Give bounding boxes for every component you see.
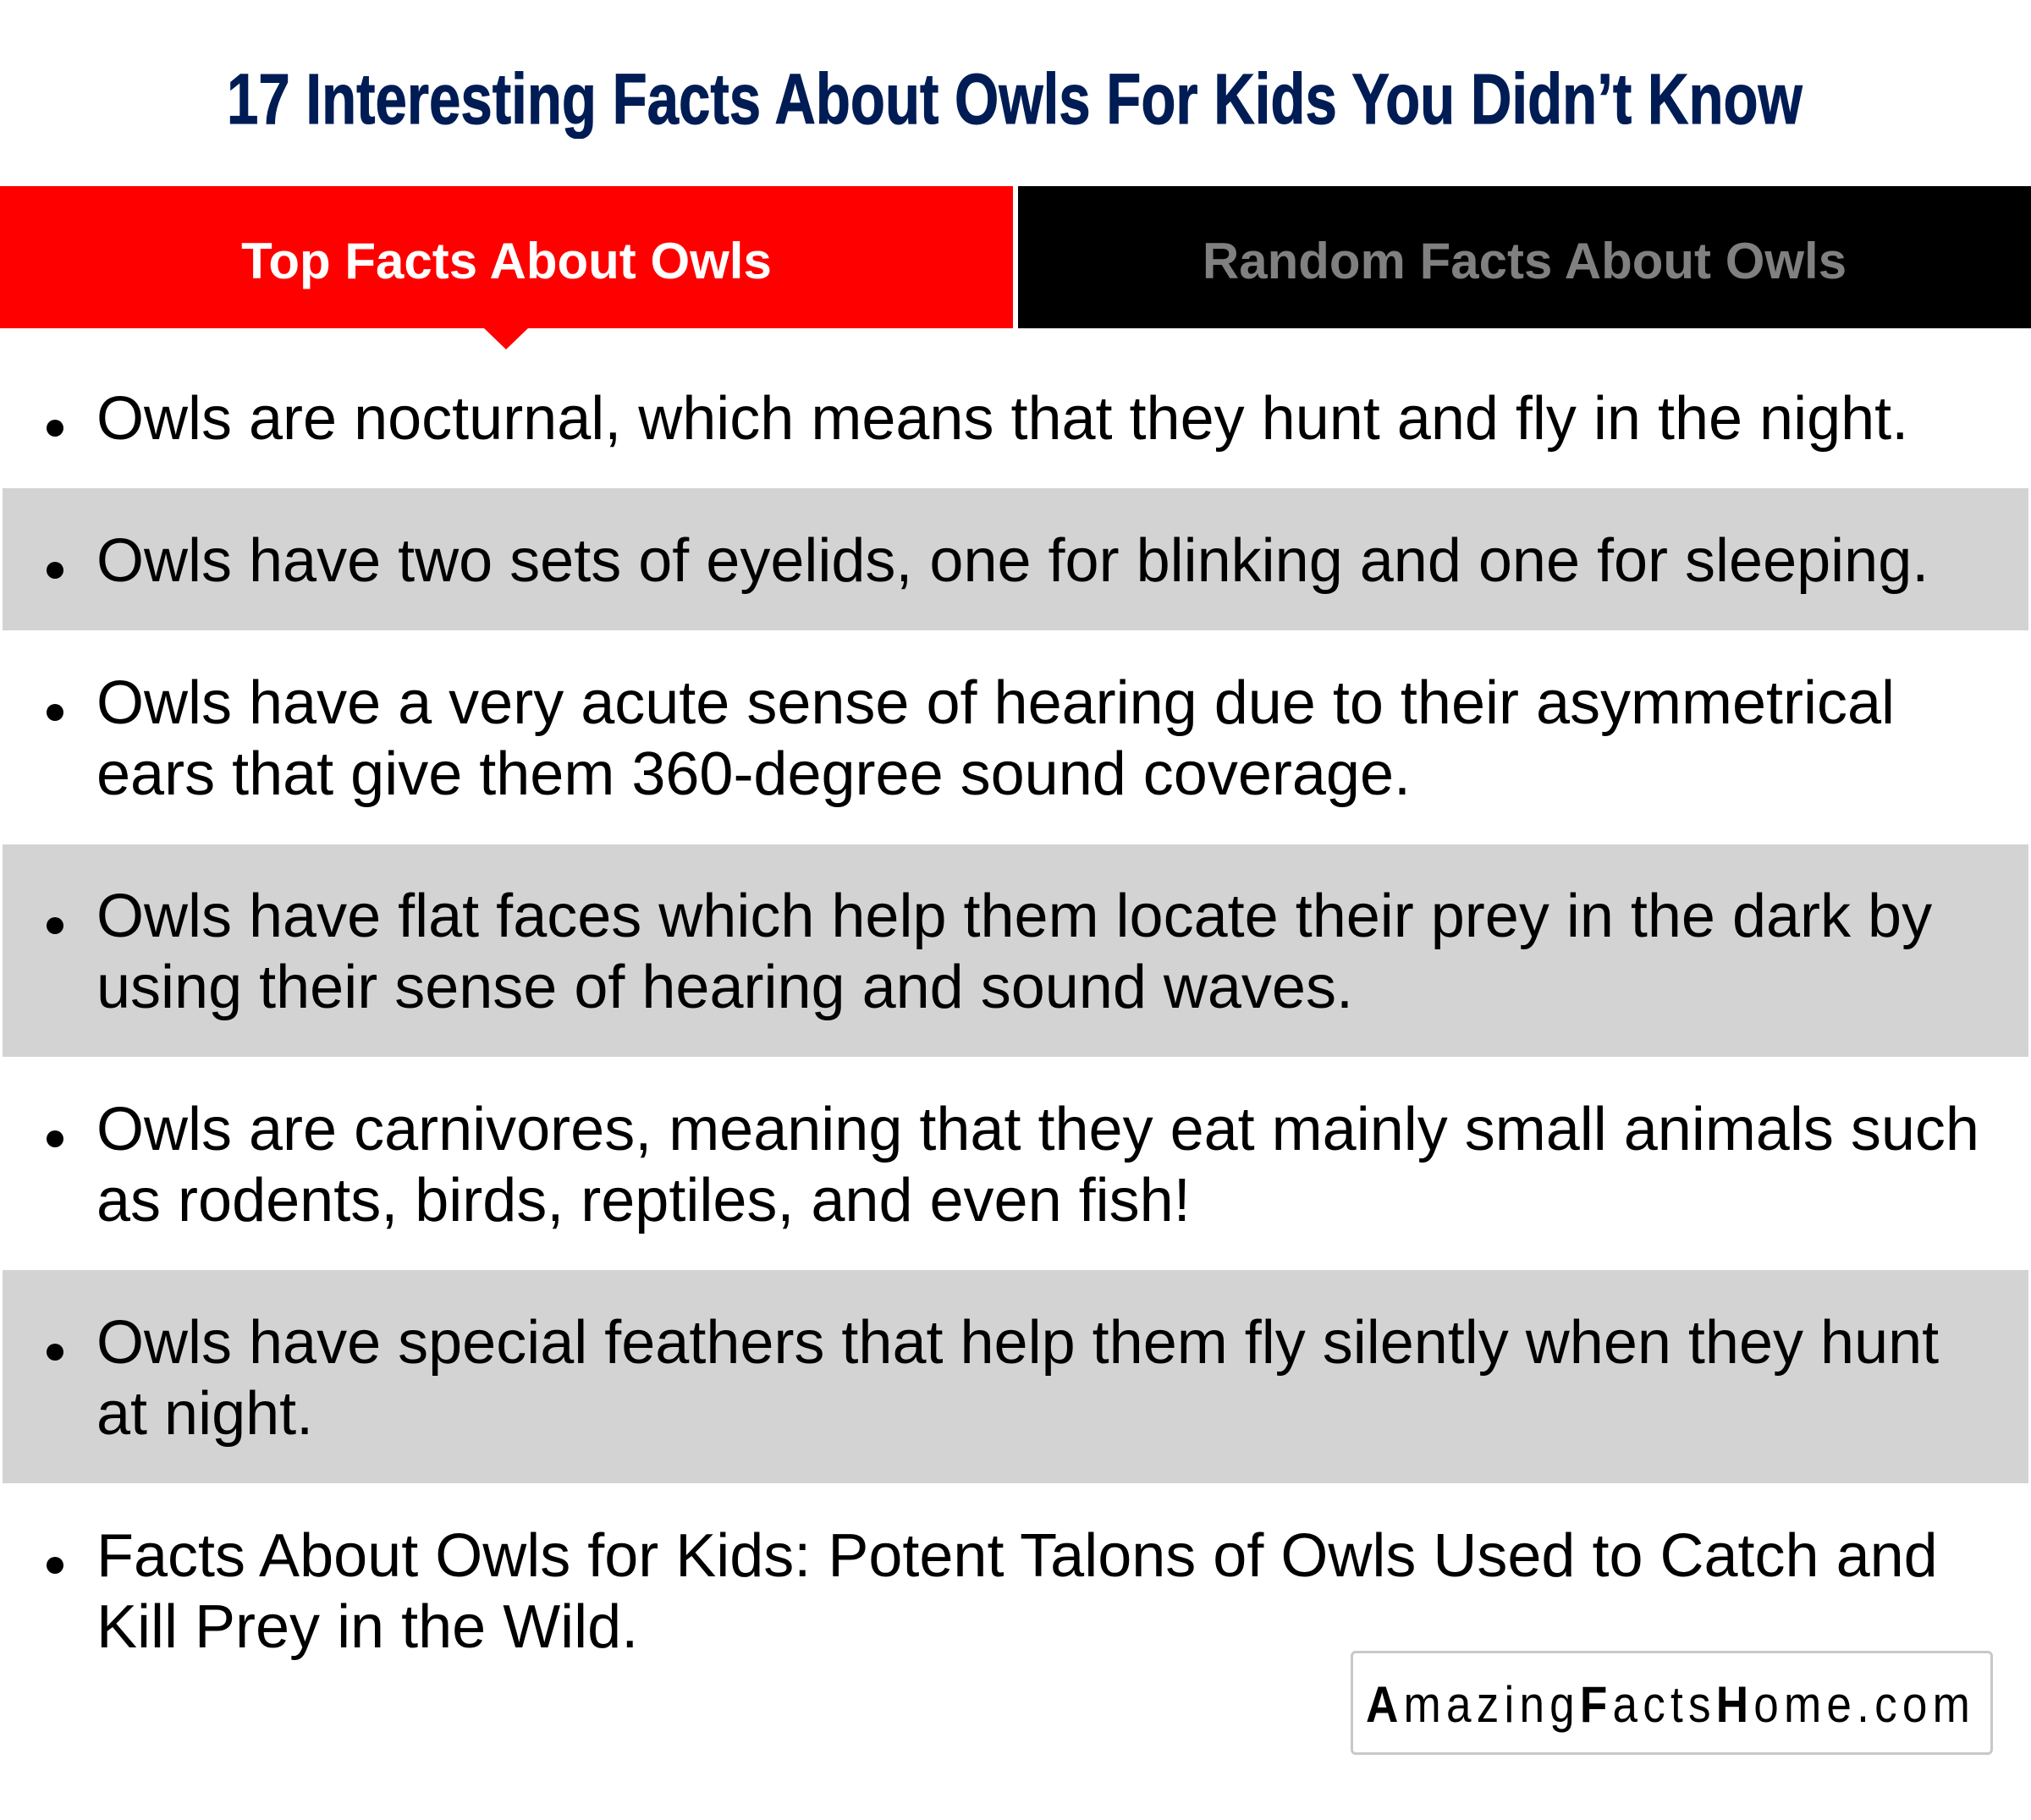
tab: top facts (active) (0, 186, 1013, 328)
fact 4 (47, 883, 1932, 1021)
fact 5: as rodents, birds, reptiles, and even fish! (96, 1167, 1191, 1234)
arrow: active tab pointer (483, 327, 529, 349)
fact 5 (47, 1096, 1979, 1234)
fact 4: using their sense of hearing and sound waves. (96, 954, 1353, 1021)
fact 6 (47, 1309, 1939, 1448)
fact 1: Owls are nocturnal, which means that they hunt and fly in the night. (96, 385, 1908, 453)
row background 6 (3, 1270, 2028, 1483)
fact 7: Kill Prey in the Wild. (96, 1593, 638, 1661)
fact 2: Owls have two sets of eyelids, one for blinking and one for sleeping. (96, 527, 1929, 595)
title: 17 Interesting Facts About Owls For Kids You Didn’t Know (227, 59, 1803, 139)
row background 4 (3, 844, 2028, 1057)
tab: top facts (active): Top Facts About Owls (241, 233, 772, 289)
fact 7: Facts About Owls for Kids: Potent Talons of Owls Used to Catch and (96, 1522, 1938, 1590)
fact 7 (47, 1522, 1938, 1661)
logo: AmazingFactsHome.com: AmazingFactsHome.com (1366, 1676, 1975, 1733)
fact 3 (47, 669, 1895, 808)
row background 2 (3, 488, 2028, 630)
fact 5: Owls are carnivores, meaning that they eat mainly small animals such (96, 1096, 1979, 1163)
fact 3: ears that give them 360-degree sound coverage. (96, 740, 1411, 808)
tab: random facts (inactive) (1018, 186, 2031, 328)
fact 4: Owls have flat faces which help them locate their prey in the dark by (96, 883, 1932, 950)
logo: AmazingFactsHome.com (1351, 1651, 1993, 1755)
fact 3: Owls have a very acute sense of hearing due to their asymmetrical (96, 669, 1895, 737)
tab: random facts (inactive): Random Facts About Owls (1203, 233, 1847, 289)
fact 6: at night. (96, 1380, 313, 1448)
fact 6: Owls have special feathers that help them fly silently when they hunt (96, 1309, 1939, 1377)
